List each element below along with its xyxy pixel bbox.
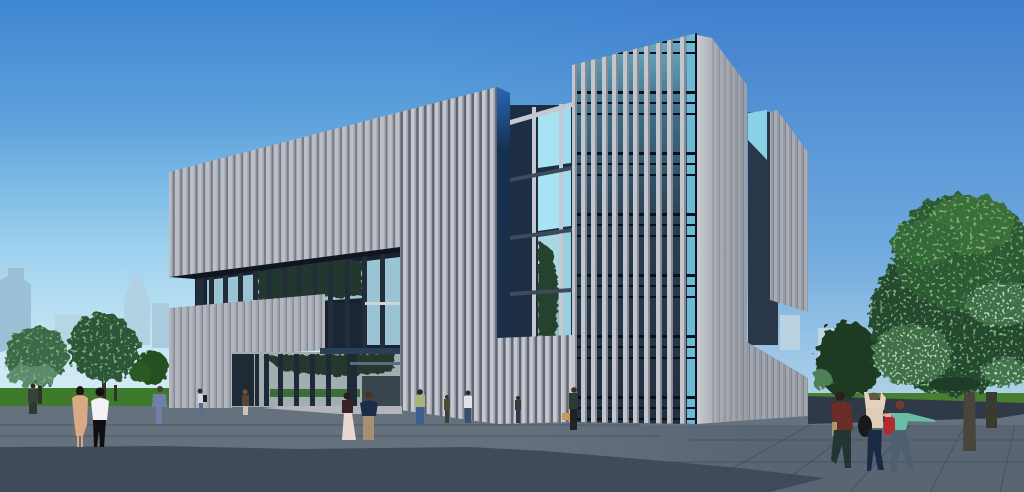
- right group: woman in green: [880, 400, 935, 472]
- back block fins: [770, 110, 808, 312]
- central glass section: [497, 87, 572, 345]
- building: [169, 30, 808, 425]
- recessed glazing band: [169, 247, 400, 350]
- pavement: [0, 396, 1024, 492]
- figures beside fins: [415, 387, 578, 430]
- right lower block: [697, 340, 808, 424]
- small figure at entrance: [242, 390, 249, 415]
- lawn left: [0, 388, 170, 408]
- right group: woman with arms raised: [858, 392, 886, 471]
- distant left figure: [28, 384, 38, 414]
- far dark tree: [129, 351, 169, 385]
- right front block: [571, 30, 697, 425]
- tree left: [6, 326, 68, 386]
- lower left fin block: [169, 294, 325, 408]
- lower fins of central section: [497, 335, 572, 424]
- couple left: [72, 386, 109, 447]
- dark glass tower: [497, 87, 510, 340]
- tree trunks: [38, 378, 117, 404]
- woman in skirt: [342, 392, 356, 440]
- left trees: [6, 313, 169, 404]
- right lower block fins: [747, 343, 808, 420]
- sky windows: [538, 108, 559, 168]
- man in blue suit: [152, 386, 167, 424]
- figure with backpack: [198, 389, 207, 416]
- dark back tree: [812, 322, 880, 398]
- right group: man in red: [831, 391, 853, 468]
- upper left fin block: [169, 112, 400, 277]
- distant city skyline: [0, 268, 834, 366]
- tree right: [69, 313, 139, 381]
- canopy underside shade: [929, 377, 981, 391]
- window frames: [510, 102, 572, 342]
- back block glass: [748, 112, 778, 345]
- right face: [697, 35, 747, 424]
- entrance: [232, 348, 402, 414]
- main trunk: [963, 390, 976, 451]
- reflected tree: [538, 240, 558, 336]
- lawn right: [805, 393, 1024, 404]
- people on the plaza: [28, 384, 935, 472]
- rear trunk: [986, 392, 997, 428]
- sunlit lower foliage: [872, 283, 1024, 386]
- right face fins: [712, 38, 747, 423]
- big tree canopy: [869, 194, 1024, 396]
- front fins: [571, 30, 686, 425]
- right trees: [812, 194, 1024, 451]
- back block sky reflection: [748, 110, 767, 160]
- woman with jacket: [360, 391, 378, 440]
- central column of fins: [400, 87, 497, 424]
